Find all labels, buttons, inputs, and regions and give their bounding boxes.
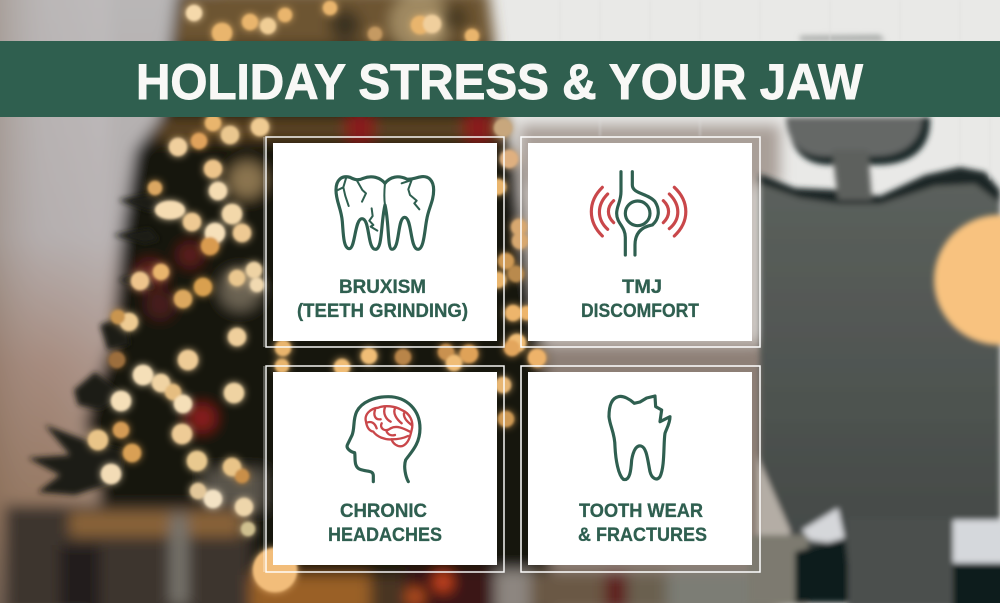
bokeh lights xyxy=(88,1,546,592)
label line 2: HEADACHES xyxy=(328,524,442,546)
tree branch tips xyxy=(28,194,165,495)
panel: bruxism xyxy=(264,137,504,347)
label line 2: DISCOMFORT xyxy=(581,300,699,322)
panel: chronic headaches xyxy=(264,366,504,572)
panel: tooth wear and fractures xyxy=(521,366,760,572)
icon: fractured tooth xyxy=(609,396,670,480)
title: HOLIDAY STRESS & YOUR JAW xyxy=(136,54,864,110)
panel: tmj discomfort xyxy=(521,137,760,347)
wall stripes xyxy=(560,0,990,180)
label: TMJ xyxy=(622,276,662,298)
label line 2: (TEETH GRINDING) xyxy=(297,300,468,322)
large orange bokeh xyxy=(934,215,1000,345)
title banner xyxy=(0,41,1000,117)
icon: head with brain xyxy=(347,397,420,482)
label line 2: & FRACTURES xyxy=(578,524,707,546)
label: TOOTH WEAR xyxy=(579,500,703,522)
label: CHRONIC xyxy=(340,500,427,522)
icon: cracked teeth xyxy=(336,177,434,249)
label: BRUXISM xyxy=(339,276,426,298)
icon: jaw joint with red pain arcs xyxy=(591,172,686,255)
dental chair xyxy=(748,35,1000,603)
